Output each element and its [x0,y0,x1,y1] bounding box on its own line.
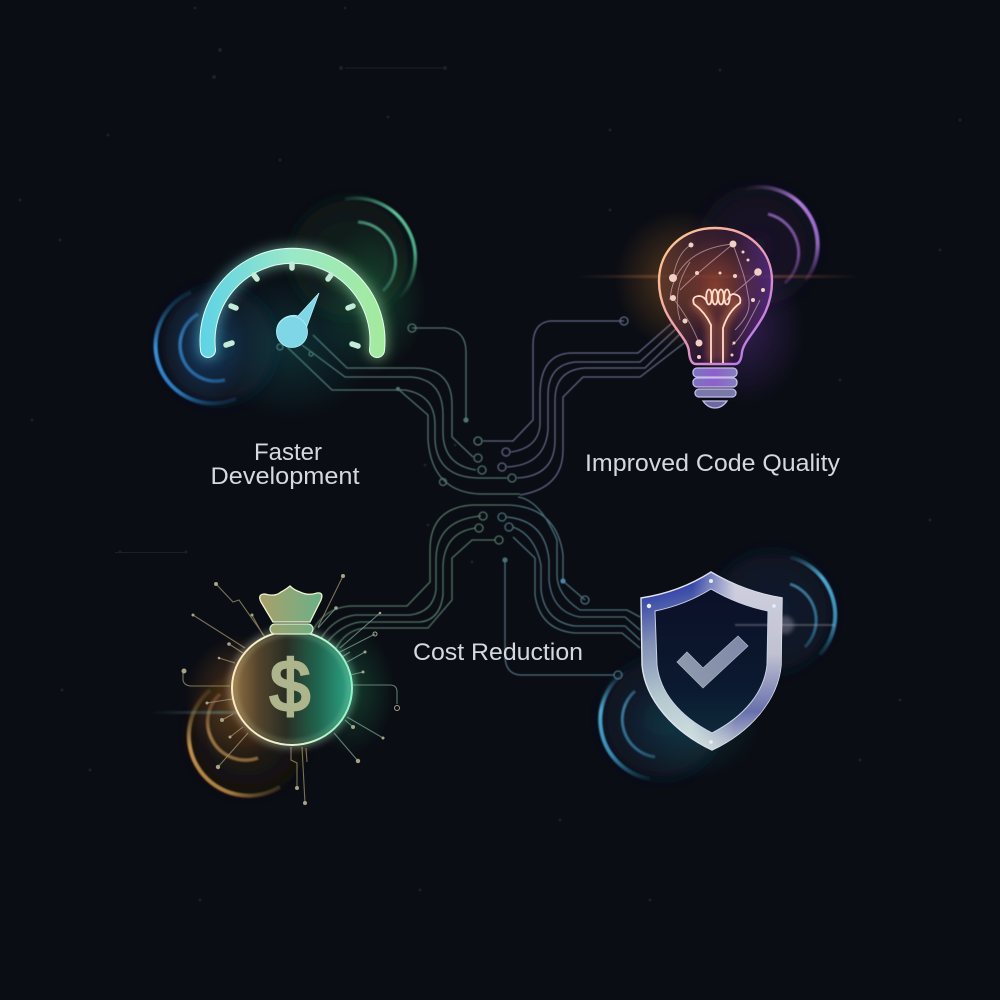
label: Cost Reduction: Cost Reduction [413,639,583,666]
circuit lines: gauge to hub [277,324,520,494]
bulb nodes [669,240,765,359]
bulb filament [693,290,740,363]
dollar sign: $ [270,647,310,727]
icon: light bulb [575,187,860,408]
circuit lines: bulb to hub [474,317,688,495]
label: Faster Development: Development [210,463,360,490]
shield body [641,572,782,750]
lens flare [575,275,860,278]
bulb screw base [693,368,737,408]
shield glow [620,670,760,780]
bag swirl backdrop [181,669,313,801]
bulb glow [615,210,805,405]
bag body [232,631,352,745]
bag top [260,586,322,622]
icon: money bag [150,574,400,805]
bulb filament glow [693,297,740,362]
ray end nodes [182,574,400,805]
shield swirl backdrop [594,544,840,786]
icon: speedometer gauge [155,198,427,420]
gauge swirl arcs green [345,198,415,297]
gauge arc [208,256,378,350]
bag circuit rays [183,576,343,803]
shield flare [735,616,835,634]
bag neck [270,624,313,634]
shield inner [655,589,768,733]
circuit lines: shield to hub [498,497,640,679]
shield swirl arcs [600,557,835,779]
label: Faster Development: Faster [254,439,322,466]
label: Improved Code Quality: Improved Code Quality [585,450,840,477]
gauge swirl backdrop [152,192,416,411]
bag swirl arcs [189,690,280,796]
bag rim glow [232,631,352,745]
bulb swirl arcs [745,187,818,283]
bulb swirl backdrop [692,179,824,311]
circuit lines: bag to hub [313,505,510,650]
gauge needle [276,293,319,348]
icon: shield [600,557,835,780]
bag glow [185,625,395,765]
bulb inner circuits [670,244,760,345]
flare [150,711,290,714]
check mark [677,636,748,688]
shield rivets [647,579,776,744]
gauge swirl arcs blue [155,292,236,404]
bulb glass [659,228,772,364]
gauge ticks [226,264,358,346]
gauge glow [163,225,427,420]
label: Faster Development [210,439,360,490]
